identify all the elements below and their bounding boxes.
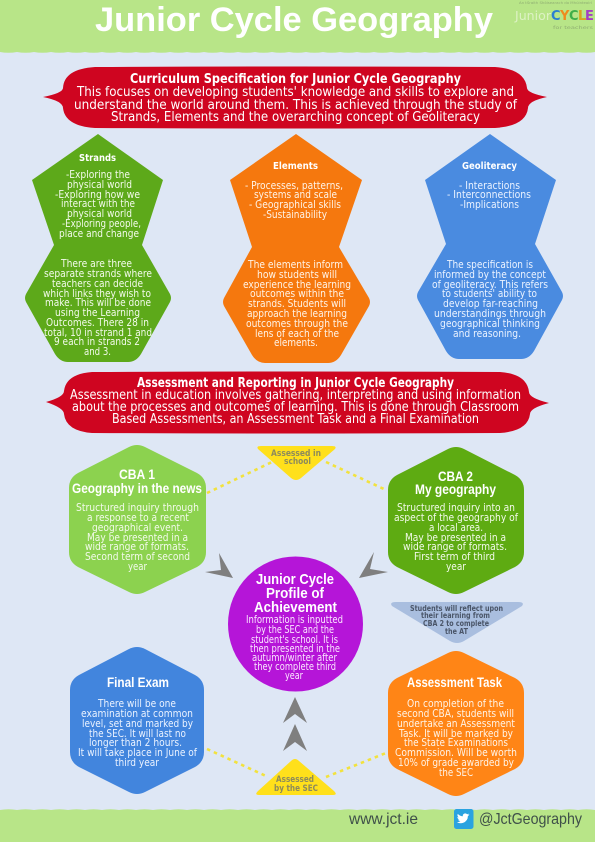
panel: elements: experience the learning: [243, 279, 351, 291]
panel: geoliteracy: Geoliteracy: [462, 161, 517, 172]
panel: elements: - Geographical skills: [249, 199, 341, 211]
panel: geoliteracy: understandings through: [434, 308, 546, 320]
panel: geoliteracy: The specification is: [446, 259, 533, 271]
logo: Junior Cycle: for teachers: [553, 25, 593, 30]
panel: strands: There are three: [60, 258, 132, 270]
panel: final exam: third year: [115, 757, 160, 769]
panel: junior cycle profile of achievement: Profile of: [266, 585, 325, 602]
panel: final exam: Final Exam: [107, 674, 169, 690]
panel: geoliteracy: - Interactions: [459, 180, 520, 192]
callout: assessed in school: school: [284, 457, 311, 467]
callout: students will reflect: their learning from: [421, 611, 490, 620]
panel: elements: systems and scale: [254, 189, 337, 201]
panel: CBA 2: May be presented in a: [405, 532, 506, 544]
banner: curriculum specification: understand the world around them. This is achieved through the study of: [74, 98, 517, 113]
panel: junior cycle profile of achievement: by the SEC and the: [256, 624, 334, 636]
panel: strands: -Exploring people,: [62, 218, 141, 230]
panel: CBA 1: wide range of formats.: [85, 541, 189, 553]
panel: strands: -Exploring the: [66, 169, 130, 181]
logo: Junior Cycle: An tSraith Shóisearach do Mhúinteoirí: [519, 1, 593, 5]
panel: CBA 2: [388, 447, 524, 594]
callout: assessed by the SEC: Assessed: [276, 775, 314, 785]
panel: strands: physical world: [67, 208, 132, 220]
panel: elements: how students will: [257, 269, 337, 281]
panel: elements: outcomes through the: [246, 318, 348, 330]
banner: curriculum specification: Strands, Elements and the overarching concept of Geoliteracy: [111, 110, 480, 125]
panel: elements: outcomes within the: [250, 288, 344, 300]
panel: strands: and 3.: [84, 346, 111, 358]
panel: CBA 1: [69, 445, 206, 594]
panel: CBA 1: geographical event.: [92, 522, 183, 534]
panel: strands: -Exploring how we: [55, 189, 140, 201]
panel: elements: approach the learning: [247, 308, 347, 320]
panel: final exam: the SEC. It will last no: [89, 728, 186, 740]
panel: junior cycle profile of achievement: [228, 556, 363, 692]
panel: strands: teachers can decide: [52, 278, 143, 290]
panel: strands: total, 10 in strand 1 and: [44, 327, 152, 339]
panel: strands: place and change: [59, 228, 139, 240]
panel: junior cycle profile of achievement: year: [285, 670, 304, 682]
panel: assessment task: Assessment Task: [407, 674, 502, 690]
callout: assessed in school: Assessed in: [271, 449, 321, 459]
panel: strands: [25, 134, 171, 362]
banner: assessment and reporting: Assessment and Reporting in Junior Cycle Geography: [137, 376, 454, 391]
panel: strands: make. This will be done: [45, 297, 151, 309]
panel: assessment task: second CBA, students will: [397, 708, 514, 720]
panel: strands: 9 each in strands 2: [54, 336, 140, 348]
panel: assessment task: the State Examinations: [404, 737, 508, 749]
panel: CBA 2: year: [446, 561, 467, 573]
panel: assessment task: Task. It will be marked by: [398, 728, 513, 740]
panel: geoliteracy: to students' ability to: [442, 288, 537, 300]
panel: CBA 2: wide range of formats.: [403, 541, 507, 553]
callout: students will reflect: the AT: [445, 627, 468, 636]
arrow: CBA 1 to profile: [205, 553, 233, 578]
callout: students will reflect: CBA 2 to complete: [423, 619, 489, 628]
panel: assessment task: the SEC: [439, 767, 473, 779]
panel: CBA 1: a response to a recent: [87, 512, 189, 524]
callout: assessed in school: [257, 446, 336, 480]
callout: assessed by the SEC: [256, 759, 336, 795]
panel: final exam: examination at common: [81, 708, 193, 720]
callout: assessed by the SEC: by the SEC: [274, 784, 318, 794]
panel: strands: using the Learning: [55, 307, 140, 319]
panel: CBA 1: May be presented in a: [87, 532, 188, 544]
arrow: CBA 2 to profile: [359, 552, 388, 578]
icon: twitter: [454, 809, 474, 829]
panel: strands: interact with the: [61, 198, 135, 210]
panel: geoliteracy: develop far-reaching: [443, 298, 538, 310]
logo: Junior Cycle: E: [585, 9, 594, 24]
panel: geoliteracy: informed by the concept: [434, 269, 546, 281]
panel: junior cycle profile of achievement: Information is inputted: [246, 614, 343, 626]
dotted connectors: [207, 462, 386, 777]
logo: Junior Cycle: L: [578, 9, 586, 24]
twitter handle: @JctGeography: [479, 811, 582, 828]
panel: final exam: level, set and marked by: [82, 718, 193, 730]
panel: strands: which links they wish to: [43, 288, 151, 300]
panel: junior cycle profile of achievement: autumn/winter after: [252, 652, 338, 664]
banner: assessment and reporting: Assessment in education involves gathering, interpreting and using information: [70, 388, 521, 403]
panel: geoliteracy: - Interconnections: [447, 189, 531, 201]
banner: assessment and reporting: Based Assessments, an Assessment Task and a Final Examination: [112, 412, 479, 427]
panel: elements: elements.: [274, 337, 318, 349]
arrow: upward chevron bottom: [283, 724, 307, 751]
panel: geoliteracy: and reasoning.: [453, 328, 521, 340]
panel: elements: - Processes, patterns,: [245, 180, 343, 192]
callout: students will reflect: [391, 602, 523, 643]
footer band: [0, 809, 595, 842]
panel: elements: Elements: [273, 161, 318, 172]
panel: junior cycle profile of achievement: they complete third: [254, 661, 336, 673]
callout: students will reflect: Students will reflect upon: [410, 604, 503, 613]
panel: geoliteracy: -Implications: [460, 199, 519, 211]
panel: assessment task: Commission. Will be worth: [395, 747, 517, 759]
panel: CBA 1: Geography in the news: [72, 480, 202, 496]
panel: CBA 1: CBA 1: [119, 466, 155, 482]
panel: CBA 2: a local area.: [429, 522, 483, 534]
banner: assessment and reporting: about the processes and outcomes of learning. This is done through Classroom: [72, 400, 519, 415]
panel: CBA 1: year: [128, 561, 148, 573]
panel: strands: Strands: [79, 153, 116, 164]
panel: elements: The elements inform: [247, 259, 343, 271]
panel: CBA 1: Second term of second: [85, 551, 190, 563]
header band: [0, 0, 595, 53]
panel: final exam: [70, 647, 204, 794]
panel: CBA 2: aspect of the geography of: [394, 512, 518, 524]
panel: assessment task: [388, 651, 524, 796]
panel: assessment task: undertake an Assessment: [397, 718, 515, 730]
panel: final exam: longer than 2 hours.: [89, 737, 182, 749]
logo: Junior Cycle: Junior: [514, 9, 551, 23]
arrow: upward chevron top: [283, 697, 307, 723]
banner: assessment and reporting: [46, 372, 549, 434]
banner: curriculum specification: [43, 66, 547, 128]
logo: Junior Cycle: C: [569, 9, 579, 24]
panel: geoliteracy: geographical thinking: [440, 318, 540, 330]
panel: final exam: It will take place in June of: [78, 747, 197, 759]
panel: junior cycle profile of achievement: Achievement: [254, 599, 337, 616]
panel: geoliteracy: of geoliteracy. This refers: [432, 279, 548, 291]
panel: geoliteracy: [417, 134, 563, 359]
panel: elements: -Sustainability: [263, 209, 327, 221]
panel: CBA 2: CBA 2: [438, 468, 473, 484]
website: www.jct.ie: [348, 811, 418, 828]
panel: elements: strands. Students will: [248, 298, 346, 310]
panel: CBA 2: First term of third: [414, 551, 495, 563]
panel: strands: separate strands where: [44, 268, 152, 280]
panel: junior cycle profile of achievement: then presented in the: [250, 643, 340, 655]
logo: Junior Cycle: Y: [559, 9, 570, 24]
panel: elements: [223, 134, 370, 363]
panel: CBA 2: My geography: [415, 481, 496, 497]
panel: elements: lens of each of the: [255, 328, 339, 340]
panel: assessment task: 10% of grade awarded by: [398, 757, 514, 769]
logo: Junior Cycle: C: [551, 9, 561, 24]
panel: CBA 2: Structured inquiry into an: [397, 502, 515, 514]
panel: junior cycle profile of achievement: Junior Cycle: [256, 571, 334, 588]
panel: strands: physical world: [67, 179, 132, 191]
title: Junior Cycle Geography: [95, 1, 493, 39]
panel: final exam: There will be one: [97, 698, 176, 710]
panel: assessment task: On completion of the: [407, 698, 504, 710]
banner: curriculum specification: This focuses on developing students' knowledge and skills to explore and: [76, 85, 514, 100]
logo: Junior Cycle: [514, 1, 594, 30]
panel: junior cycle profile of achievement: student's school. It is: [251, 634, 338, 646]
panel: CBA 1: Structured inquiry through: [76, 502, 199, 514]
banner: curriculum specification: Curriculum Specification for Junior Cycle Geography: [130, 72, 461, 87]
panel: strands: Outcomes. There 28 in: [46, 317, 149, 329]
